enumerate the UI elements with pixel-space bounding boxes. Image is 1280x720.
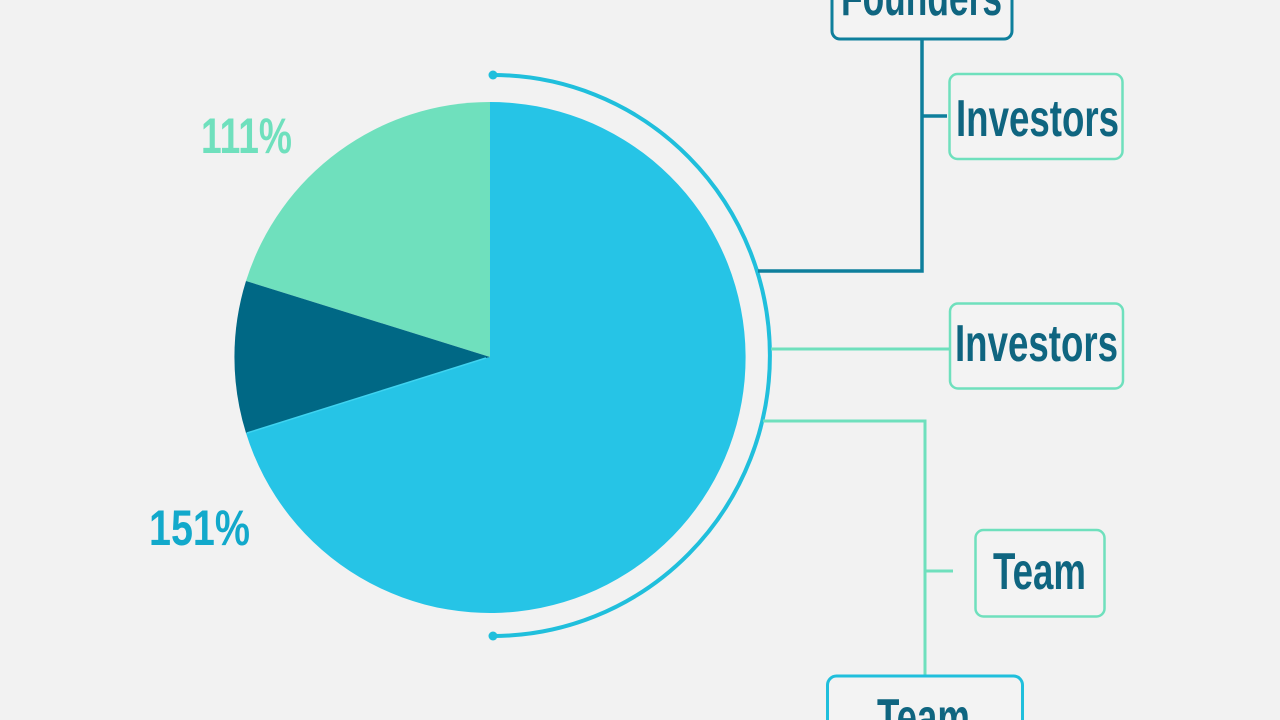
box: Investors middle xyxy=(950,304,1123,388)
slice edge highlight xyxy=(247,358,486,433)
connector: arc to Team xyxy=(763,421,953,676)
box: Investors middle: Investors xyxy=(955,315,1118,373)
pie slice: cyan majority xyxy=(246,102,746,613)
pie chart xyxy=(234,102,746,613)
box: Team bottom xyxy=(828,676,1022,720)
connector: arc to Investors xyxy=(771,348,950,350)
box: Team right: Team xyxy=(993,543,1086,601)
outer arc with end dots xyxy=(488,70,770,640)
percentage label: 151%: 151% xyxy=(149,500,250,556)
pie slice: mint xyxy=(246,102,490,357)
connector: arc to Founders xyxy=(758,40,947,271)
box: Team right xyxy=(976,530,1104,616)
pie slice: dark teal xyxy=(234,281,490,433)
box: Founders xyxy=(832,0,1012,39)
percentage label: 111%: 111% xyxy=(201,108,292,164)
box: Investors top: Investors xyxy=(956,90,1119,148)
box: Investors top xyxy=(950,74,1122,159)
